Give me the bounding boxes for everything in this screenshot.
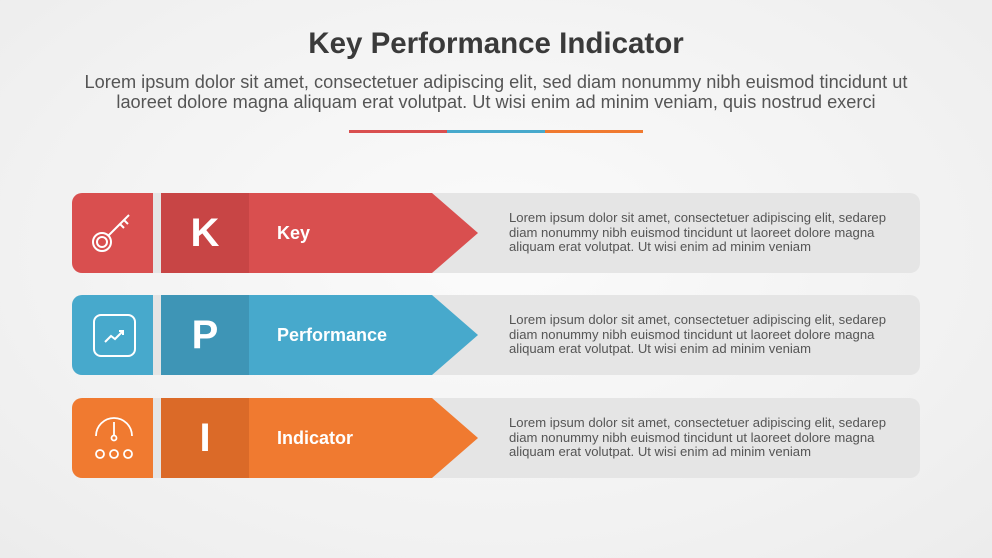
icon: chart xyxy=(72,295,153,375)
arrow: Key xyxy=(249,193,478,273)
title underline xyxy=(349,130,643,133)
title: Key Performance Indicator xyxy=(308,27,684,60)
description: diam nonummy nibh euismod tincidunt ut laoreet dolore magna xyxy=(509,326,874,342)
letter K xyxy=(161,193,249,273)
arrow: Indicator xyxy=(249,398,478,478)
row: Indicator xyxy=(72,398,920,478)
row: Indicator: Indicator xyxy=(277,428,353,448)
letter P: P xyxy=(192,313,218,357)
row: Performance xyxy=(72,295,920,375)
subtitle: laoreet dolore magna aliquam erat volutpat. Ut wisi enim ad minim veniam, quis nostrud exerci xyxy=(116,92,876,112)
row: Key: Key xyxy=(277,223,310,243)
row: Performance: Performance xyxy=(277,325,387,345)
icon: gauge xyxy=(72,398,153,478)
letter I: I xyxy=(199,416,211,460)
description: aliquam erat volutpat. Ut wisi enim ad minim veniam xyxy=(509,341,811,356)
description: Lorem ipsum dolor sit amet, consectetuer adipiscing elit, sedarep xyxy=(509,312,886,327)
description: diam nonummy nibh euismod tincidunt ut laoreet dolore magna xyxy=(509,224,874,240)
letter I xyxy=(161,398,249,478)
description: Lorem ipsum dolor sit amet, consectetuer adipiscing elit, sedarep xyxy=(509,415,886,430)
description: Lorem ipsum dolor sit amet, consectetuer adipiscing elit, sedarep xyxy=(509,210,886,225)
description: diam nonummy nibh euismod tincidunt ut laoreet dolore magna xyxy=(509,430,874,444)
arrow: Performance xyxy=(249,295,478,375)
icon: key xyxy=(72,193,153,273)
description: aliquam erat volutpat. Ut wisi enim ad minim veniam xyxy=(509,444,811,459)
letter P xyxy=(161,295,249,375)
row: Key xyxy=(72,193,920,273)
description xyxy=(509,415,886,459)
description xyxy=(509,210,886,254)
description: aliquam erat volutpat. Ut wisi enim ad minim veniam xyxy=(509,239,811,254)
subtitle xyxy=(85,72,908,112)
description xyxy=(509,312,886,356)
subtitle: Lorem ipsum dolor sit amet, consectetuer adipiscing elit, sed diam nonummy nibh euismod tincidunt ut xyxy=(85,72,907,92)
letter K: K xyxy=(191,211,219,255)
